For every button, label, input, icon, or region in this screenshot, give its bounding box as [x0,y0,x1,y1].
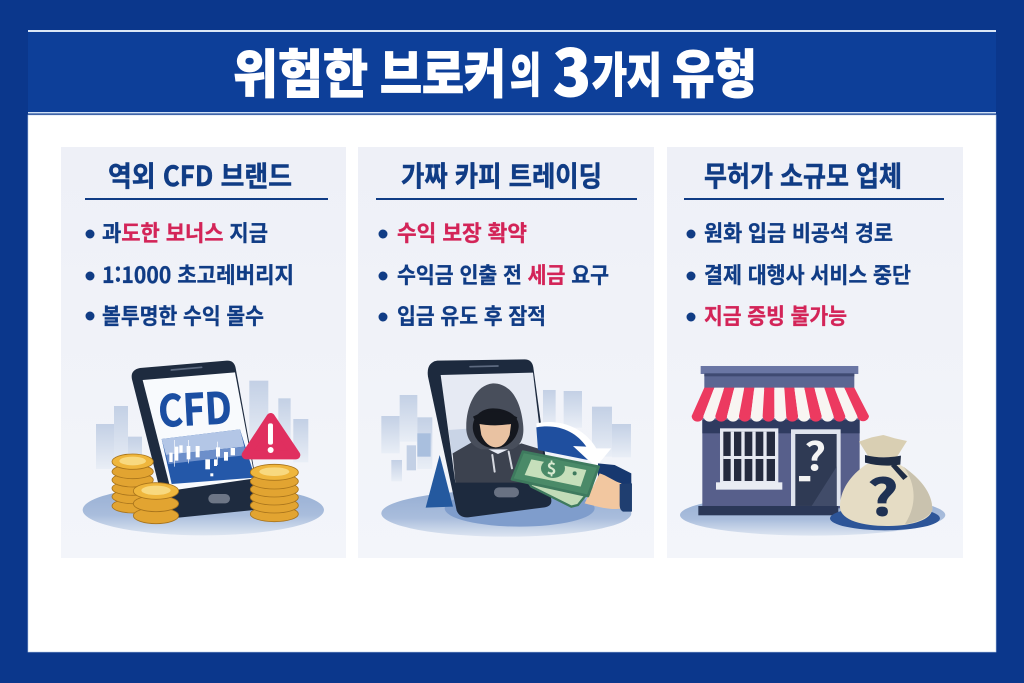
bullet list: 원화 입금 비공석 경로 [704,216,893,248]
bullet list: 결제 대행사 서비스 중단 [704,258,911,290]
candlestick chart [169,440,235,476]
title: 가지 [592,37,662,106]
arrow: money flow [536,422,611,467]
heading: 무허가 소규모 업체: 무허가 소규모 업체 [704,155,902,195]
icon: coin stack right [250,464,298,522]
hooded figure [466,383,523,472]
illustration: unlicensed shop and money bag [680,366,945,536]
dollar sign: $ [547,455,556,479]
bullet list: 수익 보장 확약 [397,216,527,248]
bullet list [686,216,911,331]
bullet list: 1:1000 초고레버리지 [102,258,294,290]
icon: money bag [830,435,940,531]
title: 3 [553,23,591,115]
title: 위험한 [233,33,368,108]
bullet list: 지금 증빙 불가능 [704,299,847,331]
door with question mark: ? [804,426,826,483]
phone stand [426,455,453,508]
illustration: CFD phone with coins and warning [83,361,324,535]
icon: phone [428,359,551,517]
bullet list: 과도한 보너스 지금 [102,216,268,248]
heading: 역외 CFD 브랜드: 역외 CFD 브랜드 [108,155,292,195]
CFD label: CFD [157,374,233,440]
bullet list [86,216,294,331]
panel: 무허가 소규모 업체 [667,147,963,558]
door with question mark [791,426,841,506]
header band [28,23,996,115]
icon: phone [132,361,260,518]
panel: 가짜 카피 트레이딩 [358,147,654,558]
icon: cash and hand [512,452,632,512]
bullet list: 수익금 인출 전 세금 요구 [397,258,609,290]
icon: coin stack left [112,454,153,513]
icon: shop [692,366,869,515]
icon: coin stack front [133,483,179,524]
title: 유형 [672,33,757,108]
icon: money bag: ? [868,459,898,531]
awning [692,388,869,422]
title [233,23,757,115]
bullet list: 입금 유도 후 잠적 [397,299,546,331]
bullet list [378,216,609,331]
heading: 가짜 카피 트레이딩: 가짜 카피 트레이딩 [401,155,602,195]
barred window [716,428,782,490]
white content panel [28,115,996,652]
panel: 역외 CFD 브랜드 [61,147,346,558]
icon: warning triangle [246,417,296,455]
title: 의 [510,37,541,106]
bullet list: 볼투명한 수익 몰수 [102,299,264,331]
title: 브로커 [380,33,506,108]
illustration: hooded scammer in phone with cash [381,359,632,537]
